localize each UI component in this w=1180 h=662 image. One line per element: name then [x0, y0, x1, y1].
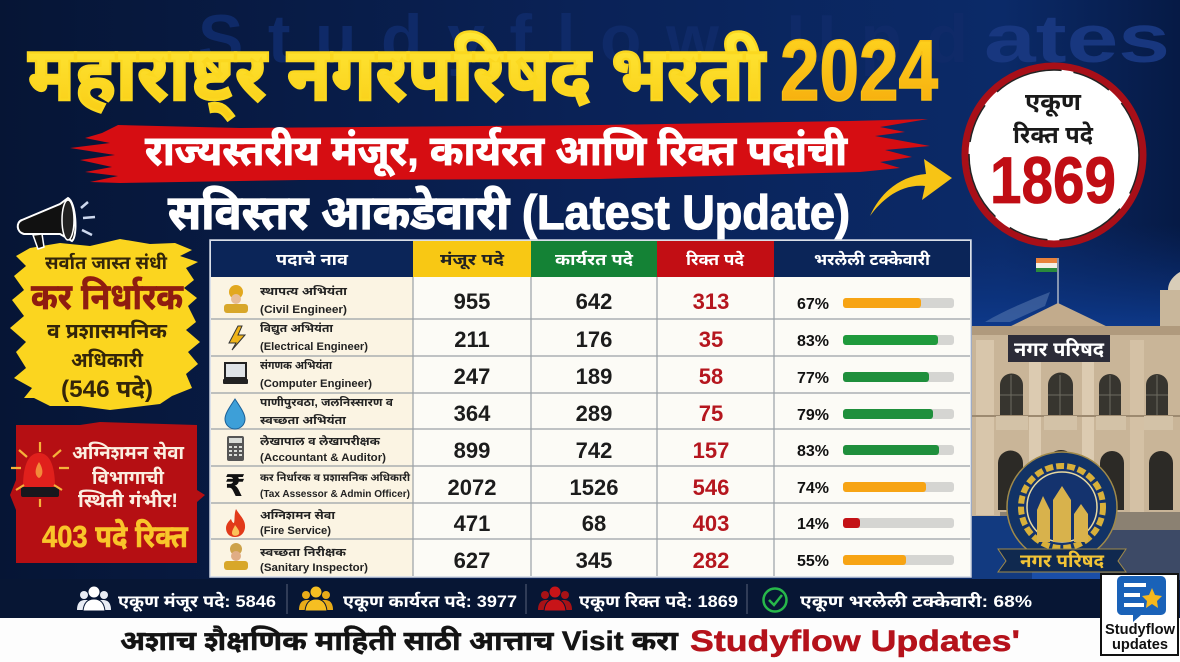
icon: megaphone [18, 198, 95, 249]
row: computer engineer: 247 [454, 364, 490, 389]
total vacant [538, 586, 738, 613]
row: sanitary inspector: स्वच्छता निरीक्षक [260, 546, 346, 559]
footer call to action [0, 618, 1180, 662]
row: water supply engineer: 79% [797, 407, 829, 424]
row: civil engineer: 642 [576, 289, 612, 314]
total working [299, 586, 517, 613]
table header: भरलेली टक्केवारी [814, 250, 930, 269]
subtitle line 2: सविस्तर आकडेवारी (Latest Update) [168, 185, 850, 240]
row: civil engineer: (Civil Engineer) [260, 304, 347, 316]
red brush banner [70, 119, 930, 183]
row: fire service: 14% [797, 516, 829, 533]
total vacancies circle [965, 66, 1143, 244]
callout: highest opportunity: अधिकारी [71, 348, 144, 372]
watermark text: ates [984, 1, 1170, 77]
totals bar [0, 579, 1102, 618]
row: electrical engineer: विद्युत अभियंता [260, 322, 334, 336]
illustration: municipal building [972, 225, 1180, 580]
row: computer engineer: 189 [576, 364, 612, 389]
callout: highest opportunity: सर्वात जास्त संधी [45, 252, 168, 273]
logo: studyflow updates: updates [1112, 636, 1168, 653]
logo: studyflow updates [1101, 574, 1178, 655]
row: electrical engineer [229, 322, 954, 353]
icon: siren [11, 442, 69, 507]
row: fire service: (Fire Service) [260, 525, 331, 537]
row: accountant and auditor: 742 [576, 438, 612, 463]
row: civil engineer: 955 [454, 289, 490, 314]
emblem: nagar parishad: नगर परिषद [1020, 551, 1105, 571]
row: computer engineer: (Computer Engineer) [260, 378, 372, 390]
row: civil engineer: स्थापत्य अभियंता [260, 285, 348, 298]
row: tax assessor: कर निर्धारक व प्रशासनिक अधिकारी [260, 471, 411, 484]
row: civil engineer: 67% [797, 296, 829, 313]
callout: highest opportunity [10, 239, 200, 410]
row: tax assessor: 74% [797, 480, 829, 497]
row: sanitary inspector: 282 [693, 548, 729, 573]
row: computer engineer [223, 359, 954, 390]
row: fire service: 403 [693, 511, 729, 536]
row: civil engineer [224, 285, 954, 316]
title: 2024 [780, 23, 938, 119]
table header: कार्यरत पदे [555, 250, 634, 269]
title: महाराष्ट्र नगरपरिषद भरती [28, 32, 767, 121]
row: electrical engineer: 35 [699, 327, 723, 352]
row: electrical engineer: 211 [454, 327, 490, 352]
callout: fire service [10, 422, 205, 563]
row: sanitary inspector: 627 [454, 548, 490, 573]
callout: fire service: विभागाची [92, 467, 164, 489]
row: sanitary inspector: 55% [797, 553, 829, 570]
row: civil engineer: 313 [693, 289, 729, 314]
subtitle line 1: राज्यस्तरीय मंजूर, कार्यरत आणि रिक्त पदांची [145, 127, 848, 177]
row: tax assessor: (Tax Assessor & Admin Officer) [260, 489, 410, 500]
row: sanitary inspector [224, 543, 954, 574]
table: posts [210, 240, 971, 577]
row: water supply engineer: 75 [699, 401, 723, 426]
total vacancies circle: रिक्त पदे [1013, 121, 1093, 149]
overall filled percentage [764, 588, 1032, 613]
row: accountant and auditor: 899 [454, 438, 490, 463]
row: electrical engineer: (Electrical Engineer) [260, 341, 368, 353]
row: fire service [226, 508, 954, 537]
row: electrical engineer: 83% [797, 333, 829, 350]
row: accountant and auditor: 157 [693, 438, 729, 463]
callout: highest opportunity: (546 पदे) [61, 375, 153, 403]
row: computer engineer: 77% [797, 370, 829, 387]
table header [211, 241, 970, 277]
watermark text: Studyflow Upd [198, 1, 968, 77]
callout: highest opportunity: व प्रशासमनिक [47, 319, 168, 343]
row: tax assessor: ₹ [225, 469, 245, 504]
grid lines [211, 277, 970, 576]
row: water supply engineer: स्वच्छता अभियंता [260, 414, 347, 427]
callout: fire service: अग्निशमन सेवा [72, 441, 184, 464]
table header: मंजूर पदे [440, 250, 505, 270]
row: fire service: अग्निशमन सेवा [260, 508, 336, 522]
row: tax assessor: 1526 [570, 475, 618, 500]
total vacant: एकूण रिक्त पदे: 1869 [579, 591, 738, 613]
logo: studyflow updates: Studyflow [1105, 621, 1175, 638]
row: sanitary inspector: (Sanitary Inspector) [260, 562, 368, 574]
arrow to total [870, 159, 952, 216]
row: tax assessor: 2072 [448, 475, 496, 500]
table header: पदाचे नाव [276, 250, 348, 269]
total sanctioned [77, 586, 276, 613]
footer call to action: अशाच शैक्षणिक माहिती साठी आत्ताच Visit करा [120, 625, 679, 656]
sign: नगर परिषद [1014, 337, 1105, 361]
callout: highest opportunity: कर निर्धारक [31, 276, 184, 317]
row: fire service: 471 [454, 511, 490, 536]
total sanctioned: एकूण मंजूर पदे: 5846 [118, 591, 276, 613]
row: electrical engineer: 176 [576, 327, 612, 352]
row: water supply engineer: 364 [454, 401, 491, 426]
row: fire service: 68 [582, 511, 606, 536]
icon: flag [1036, 258, 1058, 305]
row: computer engineer: संगणक अभियंता [260, 359, 333, 372]
row: computer engineer: 58 [699, 364, 723, 389]
row: tax assessor: 546 [693, 475, 729, 500]
overall filled percentage: एकूण भरलेली टक्केवारी: 68% [800, 591, 1032, 613]
row: sanitary inspector: 345 [576, 548, 612, 573]
row: water supply engineer [225, 396, 954, 429]
table header: रिक्त पदे [686, 250, 745, 269]
row: accountant and auditor [227, 434, 954, 464]
row: water supply engineer: 289 [576, 401, 612, 426]
row: accountant and auditor: 83% [797, 443, 829, 460]
total vacancies circle: 1869 [990, 143, 1116, 217]
total working: एकूण कार्यरत पदे: 3977 [343, 591, 517, 613]
row: accountant and auditor: (Accountant & Auditor) [260, 452, 386, 464]
footer call to action: Studyflow Updates' [690, 625, 1020, 658]
callout: fire service: 403 पदे रिक्त [42, 519, 189, 554]
row: accountant and auditor: लेखापाल व लेखापरीक्षक [260, 434, 380, 448]
emblem: nagar parishad [998, 452, 1126, 572]
total vacancies circle: एकूण [1025, 89, 1082, 117]
callout: fire service: स्थिती गंभीर! [78, 490, 178, 512]
row: tax assessor [225, 469, 954, 504]
row: water supply engineer: पाणीपुरवठा, जलनिस्सारण व [260, 396, 394, 410]
